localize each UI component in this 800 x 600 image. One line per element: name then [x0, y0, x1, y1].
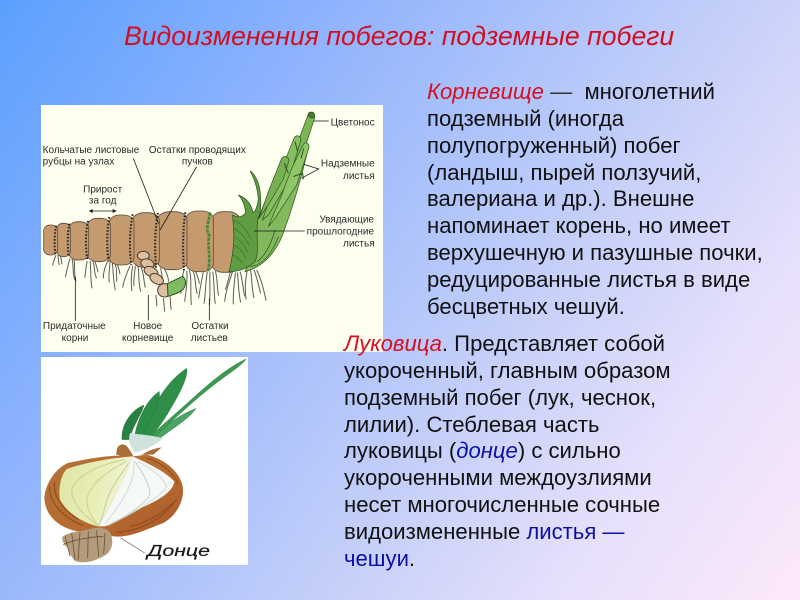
text block: rhizome: валериана и др.). Внешне [427, 186, 694, 211]
panel background [41, 357, 248, 565]
lower leaf [153, 408, 196, 440]
text block: rhizome [427, 79, 763, 319]
new rhizome branch [137, 251, 186, 297]
label: donce: Донце [145, 543, 210, 560]
text block: rhizome: редуцированные листья в виде [427, 267, 750, 292]
diagram labels: рубцы на узлах [43, 155, 114, 167]
diagram labels: Остатки [191, 321, 229, 332]
text block: bulb: видоизмененные листья — [344, 519, 625, 544]
aerial leaf C [259, 156, 289, 218]
text block: rhizome: подземный (иногда [427, 106, 624, 131]
diagram labels [43, 117, 375, 344]
text block: bulb [342, 331, 671, 571]
diagram labels: Новое [133, 321, 163, 332]
diagram labels: Цветонос [331, 117, 375, 128]
text block: bulb: Луковица. Представляет собой [344, 331, 665, 356]
scale-like leaf remains [207, 212, 210, 272]
diagram labels: Придаточные [43, 321, 106, 332]
rhizome body segments [44, 211, 240, 272]
text block: bulb: подземный побег (лук, чеснок, [344, 385, 656, 410]
diagram labels: корни [62, 333, 88, 344]
panel: onion illustration [41, 357, 248, 565]
dry neck [116, 444, 162, 457]
sheath veins [233, 220, 250, 264]
green shoots [122, 359, 246, 450]
diagram labels: листья [343, 238, 375, 249]
text block: rhizome: полупогруженный) побег [427, 133, 681, 158]
skin streaks [50, 458, 178, 532]
diagram labels: корневище [122, 333, 174, 344]
outer brown skin [44, 455, 183, 537]
light outer leaf [245, 144, 308, 272]
diagram labels: прошлогодние [307, 226, 374, 237]
leaf cut marks [284, 142, 304, 179]
text block: rhizome: напоминает корень, но имеет [427, 213, 730, 238]
text block: bulb: луковицы (донце) с сильно [344, 438, 621, 463]
flower stalk [292, 112, 315, 162]
diagram labels: Надземные [321, 158, 375, 169]
green shoot [229, 112, 315, 272]
diagram labels: Увядающие [319, 214, 374, 225]
text block: rhizome: Корневище — многолетний [427, 79, 715, 104]
node scars [55, 212, 185, 270]
text block: rhizome: верхушечную и пазушные почки, [427, 240, 763, 265]
aerial leaf B [268, 143, 309, 227]
diagram labels: листья [343, 171, 375, 182]
short leaf [122, 405, 144, 440]
panel: rhizome diagram [41, 105, 383, 352]
adventitious roots [53, 255, 266, 312]
light leaf fold [250, 230, 278, 267]
text block: rhizome: бесцветных чешуй. [427, 294, 625, 319]
leader lines [75, 121, 329, 321]
text block: bulb: несет многочисленные сочные [344, 492, 660, 517]
title: Видоизменения побегов: подземные побеги [124, 21, 674, 51]
shoot base [129, 433, 163, 452]
label line [121, 538, 145, 553]
tall leaf [140, 368, 187, 443]
long leaf [136, 359, 246, 450]
text block: bulb: укороченный, главным образом [344, 358, 671, 383]
diagram labels: Прирост [83, 184, 123, 195]
text block: bulb: чешуи. [344, 546, 415, 571]
diagram labels: листьев [191, 333, 228, 344]
diagram labels: Остатки проводящих [149, 145, 246, 156]
onion flesh: yellow side [59, 456, 133, 526]
diagram labels: за год [89, 196, 117, 207]
aerial leaf A [262, 136, 301, 220]
panel background [41, 105, 383, 352]
growth arrow [89, 209, 117, 213]
middle leaf [134, 391, 159, 440]
text block: rhizome: (ландыш, пырей ползучий, [427, 160, 701, 185]
diagram labels: Кольчатые листовые [43, 145, 140, 156]
diagram labels: пучков [182, 156, 213, 167]
text block: bulb: лилии). Стеблевая часть [344, 412, 600, 437]
onion layers [72, 460, 167, 526]
withered sheath [229, 171, 261, 272]
onion flesh: white side [98, 456, 174, 526]
basal plate and roots [62, 528, 112, 562]
text block: bulb: укороченными междоузлиями [344, 465, 652, 490]
